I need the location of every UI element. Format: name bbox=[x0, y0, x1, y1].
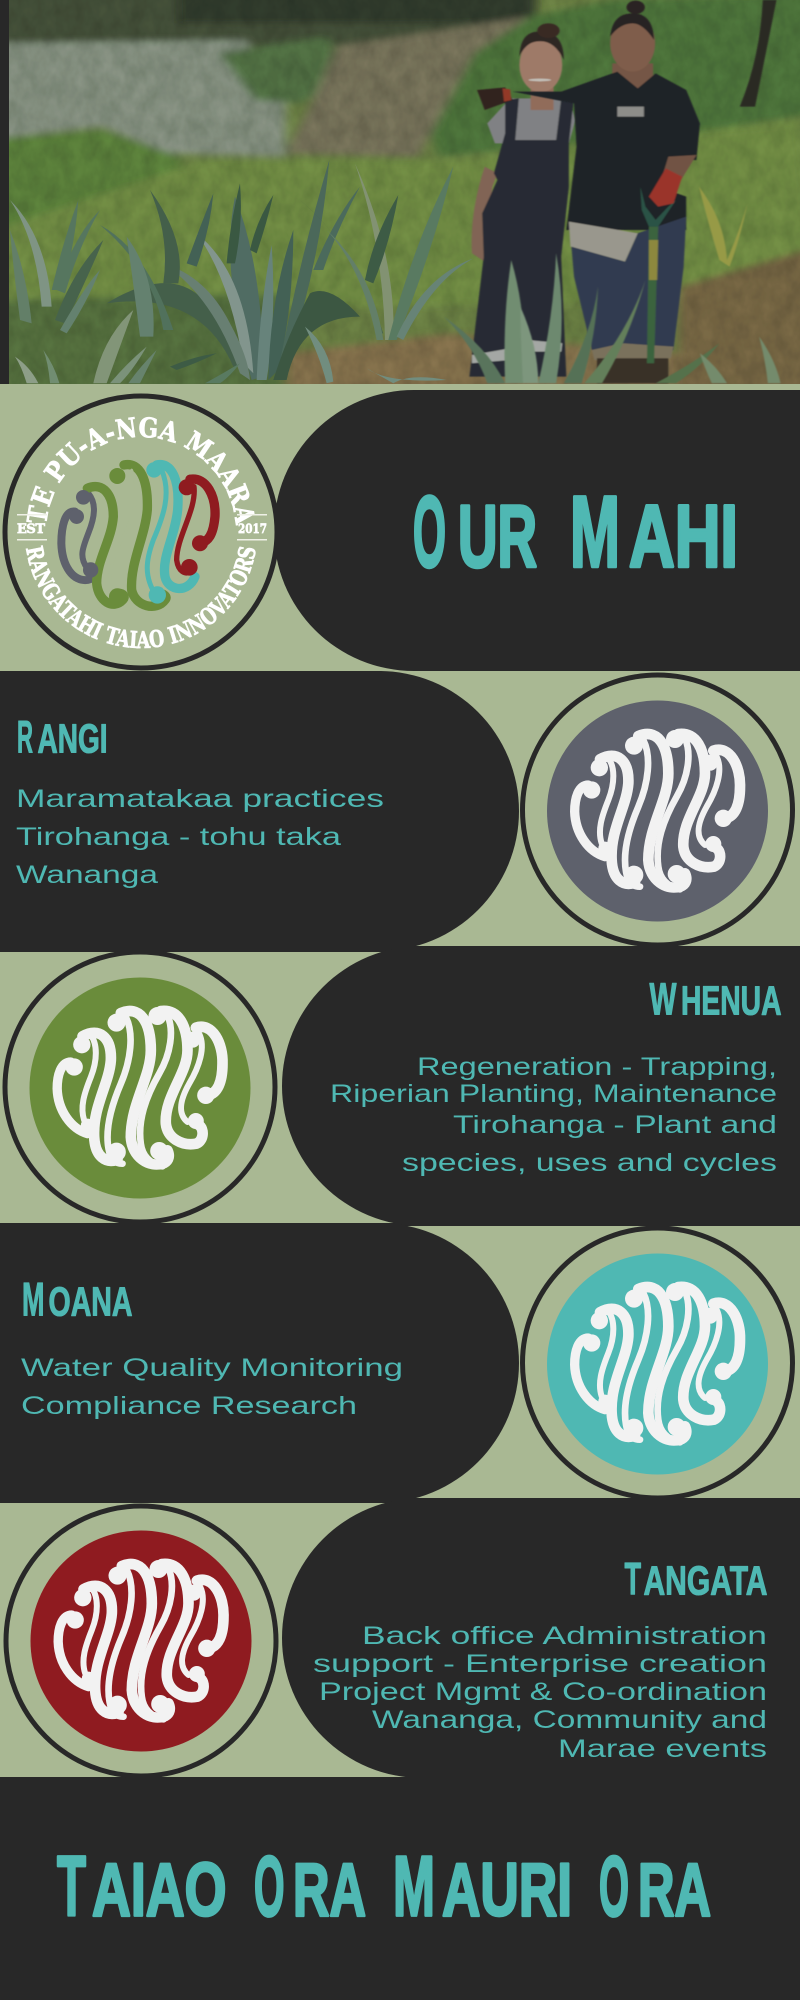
text: whenua list bbox=[330, 1053, 777, 1177]
footer title: taiao ora mauri ora: T bbox=[57, 1840, 86, 1934]
heading: rangi: ANGI bbox=[38, 716, 108, 762]
text: moana list bbox=[21, 1354, 403, 1420]
text: moana list: Compliance Research bbox=[21, 1392, 357, 1420]
heading: rangi: R bbox=[17, 712, 33, 762]
text: whenua list: Regeneration - Trapping, bbox=[417, 1053, 777, 1081]
text: tangata list: support - Enterprise creation bbox=[313, 1650, 767, 1678]
text: tangata list: Back office Administration bbox=[362, 1622, 767, 1650]
footer title: taiao ora mauri ora: AIAO bbox=[92, 1848, 226, 1932]
logo ring text: EST bbox=[17, 522, 45, 537]
river-side details and people bbox=[444, 0, 781, 383]
heading: whenua: W bbox=[650, 974, 677, 1024]
panel: rangi pill bbox=[0, 671, 519, 951]
photo: two women planting beside a river bbox=[0, 0, 800, 393]
heading: moana: M bbox=[22, 1272, 44, 1326]
heading: moana: OANA bbox=[48, 1278, 132, 1324]
text: tangata list: Project Mgmt & Co-ordination bbox=[319, 1678, 767, 1706]
woman right bbox=[513, 1, 700, 383]
foreground flax bbox=[444, 0, 781, 383]
logo koru: coloured swirls bbox=[61, 462, 215, 606]
text: rangi list: Maramatakaa practices bbox=[16, 785, 384, 813]
footer title: taiao ora mauri ora: RA bbox=[638, 1848, 711, 1932]
logo ring text bbox=[17, 416, 267, 648]
icon: moana koru badge bbox=[522, 1228, 792, 1498]
text: moana list: Water Quality Monitoring bbox=[21, 1354, 403, 1382]
panel: our mahi pill bbox=[274, 390, 800, 671]
text: tangata list: Wananga, Community and bbox=[372, 1706, 767, 1734]
text: whenua list: Tirohanga - Plant and bbox=[453, 1111, 777, 1139]
text: rangi list: Tirohanga - tohu taka bbox=[16, 823, 341, 851]
text: tangata list: Marae events bbox=[558, 1735, 767, 1763]
icon: whenua koru badge bbox=[5, 952, 275, 1222]
footer title: taiao ora mauri ora: M bbox=[393, 1840, 435, 1934]
heading: our mahi: M bbox=[570, 476, 620, 588]
logo ring text: TE PU-A-NGA MAARA bbox=[26, 416, 255, 526]
footer title: taiao ora mauri ora: O bbox=[599, 1840, 629, 1934]
footer title: taiao ora mauri ora: RA bbox=[293, 1848, 366, 1932]
footer title: taiao ora mauri ora: O bbox=[254, 1840, 284, 1934]
panel: whenua pill bbox=[282, 946, 800, 1226]
heading: our mahi: AHI bbox=[629, 486, 738, 586]
logo: te pu-a-nga maara badge bbox=[2, 394, 277, 670]
icon: tangata koru badge bbox=[6, 1506, 276, 1776]
text: tangata list bbox=[313, 1622, 767, 1763]
heading: tangata: T bbox=[624, 1554, 641, 1604]
woman left bbox=[469, 23, 576, 377]
text: whenua list: Riperian Planting, Maintenance bbox=[330, 1080, 777, 1108]
text: rangi list: Wananga bbox=[16, 861, 158, 889]
panel: moana pill bbox=[0, 1223, 519, 1503]
text: rangi list bbox=[16, 785, 384, 889]
logo ring text: 2017 bbox=[238, 522, 267, 537]
flax plants bbox=[10, 160, 473, 383]
panel: tangata pill bbox=[282, 1498, 800, 1778]
heading: our mahi: UR bbox=[458, 486, 537, 586]
icon: rangi koru badge bbox=[522, 675, 792, 945]
sage bands behind the rows bbox=[0, 384, 800, 1777]
noise texture bbox=[9, 0, 800, 384]
logo ring text: RANGATAHI TAIAO INNOVATORS bbox=[26, 545, 256, 648]
heading: our mahi: O bbox=[413, 476, 446, 588]
text: whenua list: species, uses and cycles bbox=[402, 1149, 777, 1177]
footer title: taiao ora mauri ora: AURI bbox=[442, 1848, 572, 1932]
